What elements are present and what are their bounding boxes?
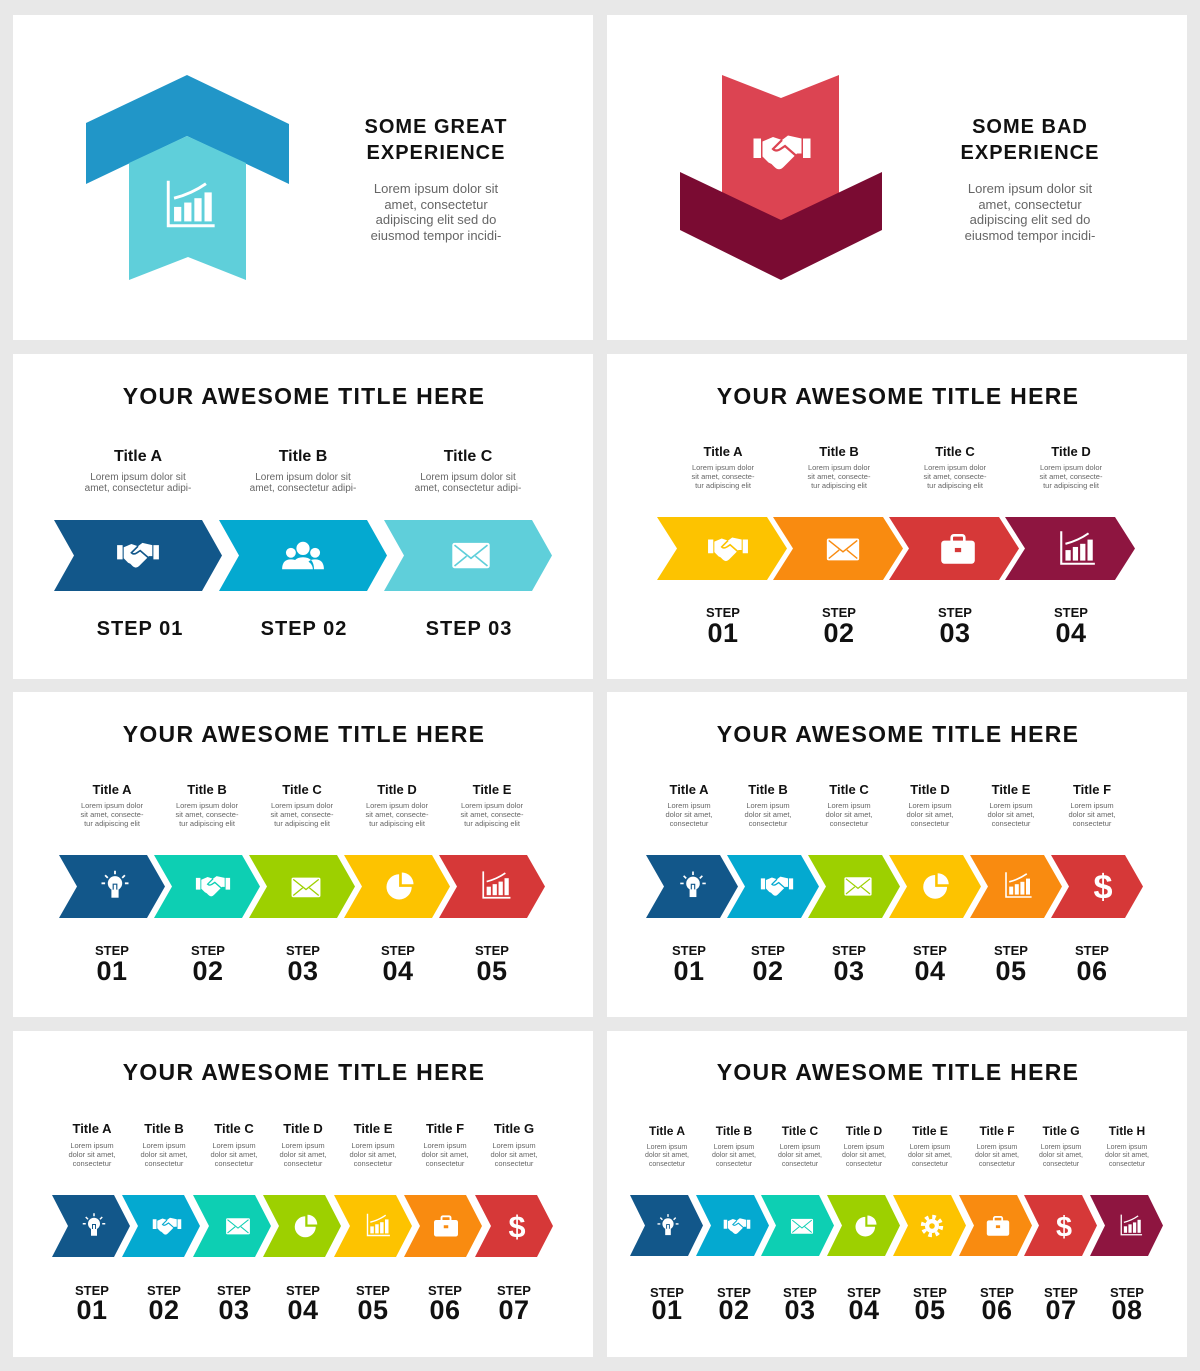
step titles: dolor sit amet, xyxy=(778,1152,822,1159)
step titles: dolor sit amet, xyxy=(1068,810,1116,819)
step titles: Title B xyxy=(279,448,327,465)
step labels xyxy=(95,943,509,986)
step titles: Lorem ipsum xyxy=(647,1144,687,1151)
step titles: Lorem ipsum xyxy=(1107,1144,1147,1151)
step titles: Lorem ipsum xyxy=(70,1141,114,1150)
step titles: Lorem ipsum dolor xyxy=(366,801,429,810)
step titles: Title D xyxy=(377,782,417,797)
step titles: Title A xyxy=(649,1124,685,1138)
step labels: 05 xyxy=(476,956,508,986)
step titles: Lorem ipsum xyxy=(1070,801,1114,810)
step titles: Lorem ipsum xyxy=(989,801,1033,810)
step titles: dolor sit amet, xyxy=(349,1150,397,1159)
step titles: Title H xyxy=(1109,1124,1145,1138)
step titles: consectetur xyxy=(73,1159,112,1168)
step labels: STEP xyxy=(832,943,866,958)
step labels: STEP xyxy=(191,943,225,958)
step labels: 02 xyxy=(718,1295,750,1325)
step titles: Title C xyxy=(214,1121,254,1136)
step titles: Title A xyxy=(92,782,132,797)
panel: bad experience xyxy=(607,15,1187,340)
step labels: STEP xyxy=(1110,1285,1144,1300)
step titles: dolor sit amet, xyxy=(908,1152,952,1159)
step titles: consectetur xyxy=(912,1161,949,1168)
step titles: Lorem ipsum xyxy=(746,801,790,810)
step titles: consectetur xyxy=(1043,1161,1080,1168)
step titles xyxy=(68,1121,538,1168)
step labels: 03 xyxy=(218,1295,250,1325)
step titles xyxy=(85,448,521,494)
step titles: consectetur xyxy=(495,1159,534,1168)
panel: 3 steps xyxy=(13,354,593,679)
step labels: STEP xyxy=(913,1285,947,1300)
step titles: consectetur xyxy=(830,819,869,828)
step titles: dolor sit amet, xyxy=(975,1152,1019,1159)
step titles: dolor sit amet, xyxy=(68,1150,116,1159)
step titles: amet, consectetur adipi- xyxy=(415,483,521,494)
step titles: Lorem ipsum xyxy=(212,1141,256,1150)
step titles: Title F xyxy=(979,1124,1015,1138)
step titles: consectetur xyxy=(426,1159,465,1168)
step labels: 02 xyxy=(148,1295,180,1325)
step labels: STEP xyxy=(822,605,856,620)
heading: some bad experience: EXPERIENCE xyxy=(961,142,1099,164)
step titles: Title B xyxy=(748,782,788,797)
text block: adipiscing elit sed do xyxy=(970,212,1090,227)
title: YOUR AWESOME TITLE HERE xyxy=(717,1059,1079,1085)
title: YOUR AWESOME TITLE HERE xyxy=(123,721,485,747)
step titles: Title F xyxy=(426,1121,464,1136)
step titles: consectetur xyxy=(992,819,1031,828)
step titles: Lorem ipsum xyxy=(780,1144,820,1151)
step titles xyxy=(645,1124,1149,1168)
step labels: 04 xyxy=(914,956,946,986)
step labels: STEP xyxy=(381,943,415,958)
step labels: 02 xyxy=(192,956,224,986)
step titles: Title F xyxy=(1073,782,1111,797)
step titles: Lorem ipsum xyxy=(827,801,871,810)
step titles: dolor sit amet, xyxy=(712,1152,756,1159)
step titles: Lorem ipsum dolor xyxy=(81,801,144,810)
step labels: 05 xyxy=(914,1295,946,1325)
step labels: STEP 02 xyxy=(261,618,347,640)
step titles: sit amet, consecte- xyxy=(81,810,144,819)
step labels: 04 xyxy=(287,1295,319,1325)
step labels xyxy=(75,1283,531,1325)
step titles: Lorem ipsum dolor xyxy=(1040,463,1103,472)
step titles: Lorem ipsum xyxy=(351,1141,395,1150)
step titles: dolor sit amet, xyxy=(825,810,873,819)
arrows xyxy=(59,855,545,918)
step labels: 01 xyxy=(673,956,705,986)
text block: eiusmod tempor incidi- xyxy=(371,228,501,243)
step labels: STEP xyxy=(286,943,320,958)
step labels: 08 xyxy=(1111,1295,1143,1325)
step labels: 03 xyxy=(939,618,971,648)
step labels: STEP xyxy=(672,943,706,958)
step labels: 03 xyxy=(784,1295,816,1325)
step titles: Title G xyxy=(1042,1124,1080,1138)
step labels: STEP xyxy=(706,605,740,620)
step titles: amet, consectetur adipi- xyxy=(250,483,356,494)
step labels: STEP 01 xyxy=(97,618,183,640)
step labels: STEP xyxy=(428,1283,462,1298)
step labels: STEP xyxy=(356,1283,390,1298)
step titles: dolor sit amet, xyxy=(645,1152,689,1159)
step labels: 04 xyxy=(1055,618,1087,648)
step labels: STEP xyxy=(75,1283,109,1298)
step titles: consectetur xyxy=(354,1159,393,1168)
step labels: 06 xyxy=(429,1295,461,1325)
text block: Lorem ipsum dolor sit xyxy=(374,181,499,196)
step titles: Title D xyxy=(283,1121,323,1136)
step titles: tur adipiscing elit xyxy=(927,481,984,490)
step labels: STEP xyxy=(286,1283,320,1298)
step labels xyxy=(706,605,1088,648)
step titles: Title B xyxy=(716,1124,753,1138)
step titles: Title A xyxy=(669,782,709,797)
panel: 6 steps xyxy=(607,692,1187,1017)
step titles: Lorem ipsum dolor xyxy=(692,463,755,472)
step titles: consectetur xyxy=(215,1159,254,1168)
step titles: sit amet, consecte- xyxy=(176,810,239,819)
step titles: Title E xyxy=(473,782,512,797)
step labels: STEP xyxy=(1075,943,1109,958)
step titles: tur adipiscing elit xyxy=(811,481,868,490)
step titles: Lorem ipsum xyxy=(492,1141,536,1150)
panel: 8 steps xyxy=(607,1031,1187,1357)
step titles: tur adipiscing elit xyxy=(179,819,236,828)
step labels: 07 xyxy=(498,1295,530,1325)
step labels: STEP xyxy=(1044,1285,1078,1300)
step labels: 04 xyxy=(382,956,414,986)
step labels: STEP 03 xyxy=(426,618,512,640)
step titles: consectetur xyxy=(670,819,709,828)
step titles: Title D xyxy=(910,782,950,797)
step titles: tur adipiscing elit xyxy=(369,819,426,828)
step labels: STEP xyxy=(751,943,785,958)
step labels: 01 xyxy=(96,956,128,986)
icon: up arrow xyxy=(86,75,289,280)
step titles: Lorem ipsum dolor sit xyxy=(90,472,186,483)
step titles: Title C xyxy=(935,444,975,459)
step titles: Lorem ipsum xyxy=(910,1144,950,1151)
step titles: tur adipiscing elit xyxy=(1043,481,1100,490)
step titles: consectetur xyxy=(145,1159,184,1168)
step titles: Lorem ipsum xyxy=(423,1141,467,1150)
title: YOUR AWESOME TITLE HERE xyxy=(123,383,485,409)
text block: Lorem ipsum dolor sit xyxy=(968,181,1093,196)
arrows xyxy=(630,1195,1163,1256)
step labels: 05 xyxy=(357,1295,389,1325)
step titles: consectetur xyxy=(284,1159,323,1168)
step labels: STEP xyxy=(497,1283,531,1298)
step titles: Lorem ipsum dolor xyxy=(808,463,871,472)
step titles: Lorem ipsum xyxy=(844,1144,884,1151)
step titles: Title B xyxy=(187,782,227,797)
step labels: STEP xyxy=(147,1283,181,1298)
step titles: Title B xyxy=(819,444,859,459)
step titles: consectetur xyxy=(649,1161,686,1168)
step titles: dolor sit amet, xyxy=(665,810,713,819)
step titles: Lorem ipsum dolor xyxy=(924,463,987,472)
step titles: dolor sit amet, xyxy=(987,810,1035,819)
arrows xyxy=(646,855,1143,918)
step titles: sit amet, consecte- xyxy=(271,810,334,819)
step titles: Lorem ipsum dolor sit xyxy=(255,472,351,483)
step titles: Title D xyxy=(846,1124,883,1138)
step titles xyxy=(692,444,1103,490)
step titles: consectetur xyxy=(1109,1161,1146,1168)
step titles: Title E xyxy=(912,1124,948,1138)
step labels: STEP xyxy=(475,943,509,958)
step titles: Lorem ipsum xyxy=(281,1141,325,1150)
step labels: 02 xyxy=(752,956,784,986)
step titles: Lorem ipsum xyxy=(667,801,711,810)
step labels: STEP xyxy=(994,943,1028,958)
step titles: Lorem ipsum dolor sit xyxy=(420,472,516,483)
panel: 7 steps xyxy=(13,1031,593,1357)
step titles: Lorem ipsum xyxy=(908,801,952,810)
step titles: tur adipiscing elit xyxy=(84,819,141,828)
step titles: Lorem ipsum dolor xyxy=(461,801,524,810)
step titles: Title A xyxy=(72,1121,112,1136)
panel: great experience xyxy=(13,15,593,340)
step titles: dolor sit amet, xyxy=(1105,1152,1149,1159)
step titles: consectetur xyxy=(979,1161,1016,1168)
step labels: 05 xyxy=(995,956,1027,986)
step titles: consectetur xyxy=(782,1161,819,1168)
step labels: STEP xyxy=(217,1283,251,1298)
step titles: dolor sit amet, xyxy=(421,1150,469,1159)
step titles: tur adipiscing elit xyxy=(464,819,521,828)
step titles: amet, consectetur adipi- xyxy=(85,483,191,494)
step labels: 06 xyxy=(981,1295,1013,1325)
step titles: Title A xyxy=(114,448,162,465)
panel: 5 steps xyxy=(13,692,593,1017)
step titles: consectetur xyxy=(1073,819,1112,828)
step titles: consectetur xyxy=(911,819,950,828)
step titles: sit amet, consecte- xyxy=(461,810,524,819)
step labels: 06 xyxy=(1076,956,1108,986)
step titles: Title C xyxy=(444,448,493,465)
step labels: STEP xyxy=(717,1285,751,1300)
step titles xyxy=(81,782,524,828)
step titles xyxy=(665,782,1116,828)
heading: some great experience: EXPERIENCE xyxy=(367,142,505,164)
arrows xyxy=(657,517,1135,580)
step titles: dolor sit amet, xyxy=(842,1152,886,1159)
step titles: Title C xyxy=(282,782,322,797)
step titles: Title C xyxy=(782,1124,819,1138)
step labels: 01 xyxy=(76,1295,108,1325)
step titles: tur adipiscing elit xyxy=(274,819,331,828)
text block: amet, consectetur xyxy=(978,197,1082,212)
title: YOUR AWESOME TITLE HERE xyxy=(717,721,1079,747)
step labels: STEP xyxy=(847,1285,881,1300)
panel: 4 steps xyxy=(607,354,1187,679)
arrows xyxy=(52,1195,553,1257)
step titles: sit amet, consecte- xyxy=(366,810,429,819)
step labels: STEP xyxy=(980,1285,1014,1300)
step titles: sit amet, consecte- xyxy=(808,472,871,481)
heading: some great experience: SOME GREAT xyxy=(365,116,507,138)
step labels: STEP xyxy=(650,1285,684,1300)
step titles: dolor sit amet, xyxy=(490,1150,538,1159)
step labels: STEP xyxy=(938,605,972,620)
heading: some bad experience: SOME BAD xyxy=(972,116,1088,138)
step titles: Title D xyxy=(1051,444,1091,459)
step titles: Title E xyxy=(992,782,1031,797)
title: YOUR AWESOME TITLE HERE xyxy=(123,1059,485,1085)
step labels: 03 xyxy=(287,956,319,986)
step labels: 01 xyxy=(707,618,739,648)
text block: amet, consectetur xyxy=(384,197,488,212)
step labels: 03 xyxy=(833,956,865,986)
step titles: sit amet, consecte- xyxy=(1040,472,1103,481)
step titles: Title B xyxy=(144,1121,184,1136)
step titles: dolor sit amet, xyxy=(744,810,792,819)
step titles: dolor sit amet, xyxy=(140,1150,188,1159)
step titles: Lorem ipsum xyxy=(714,1144,754,1151)
step labels: 02 xyxy=(823,618,855,648)
arrows xyxy=(54,520,552,591)
step labels: 07 xyxy=(1045,1295,1077,1325)
step titles: consectetur xyxy=(749,819,788,828)
text block: eiusmod tempor incidi- xyxy=(965,228,1095,243)
step labels xyxy=(650,1285,1144,1325)
step labels: STEP xyxy=(1054,605,1088,620)
step titles: Title C xyxy=(829,782,869,797)
step titles: sit amet, consecte- xyxy=(692,472,755,481)
step titles: consectetur xyxy=(846,1161,883,1168)
step titles: tur adipiscing elit xyxy=(695,481,752,490)
step titles: Title G xyxy=(494,1121,534,1136)
step titles: Title E xyxy=(354,1121,393,1136)
step titles: Lorem ipsum dolor xyxy=(271,801,334,810)
step labels: 01 xyxy=(651,1295,683,1325)
step titles: Lorem ipsum xyxy=(977,1144,1017,1151)
title: YOUR AWESOME TITLE HERE xyxy=(717,383,1079,409)
step labels: 04 xyxy=(848,1295,880,1325)
step titles: Lorem ipsum xyxy=(142,1141,186,1150)
step titles: consectetur xyxy=(716,1161,753,1168)
step labels xyxy=(672,943,1109,986)
step titles: dolor sit amet, xyxy=(279,1150,327,1159)
step titles: dolor sit amet, xyxy=(1039,1152,1083,1159)
step labels: STEP xyxy=(783,1285,817,1300)
step labels: STEP xyxy=(913,943,947,958)
icon: down arrow xyxy=(680,75,882,280)
step titles: dolor sit amet, xyxy=(210,1150,258,1159)
text block: adipiscing elit sed do xyxy=(376,212,496,227)
step titles: Title A xyxy=(703,444,743,459)
step titles: Lorem ipsum xyxy=(1041,1144,1081,1151)
step titles: Lorem ipsum dolor xyxy=(176,801,239,810)
step labels: STEP xyxy=(95,943,129,958)
step titles: sit amet, consecte- xyxy=(924,472,987,481)
step titles: dolor sit amet, xyxy=(906,810,954,819)
